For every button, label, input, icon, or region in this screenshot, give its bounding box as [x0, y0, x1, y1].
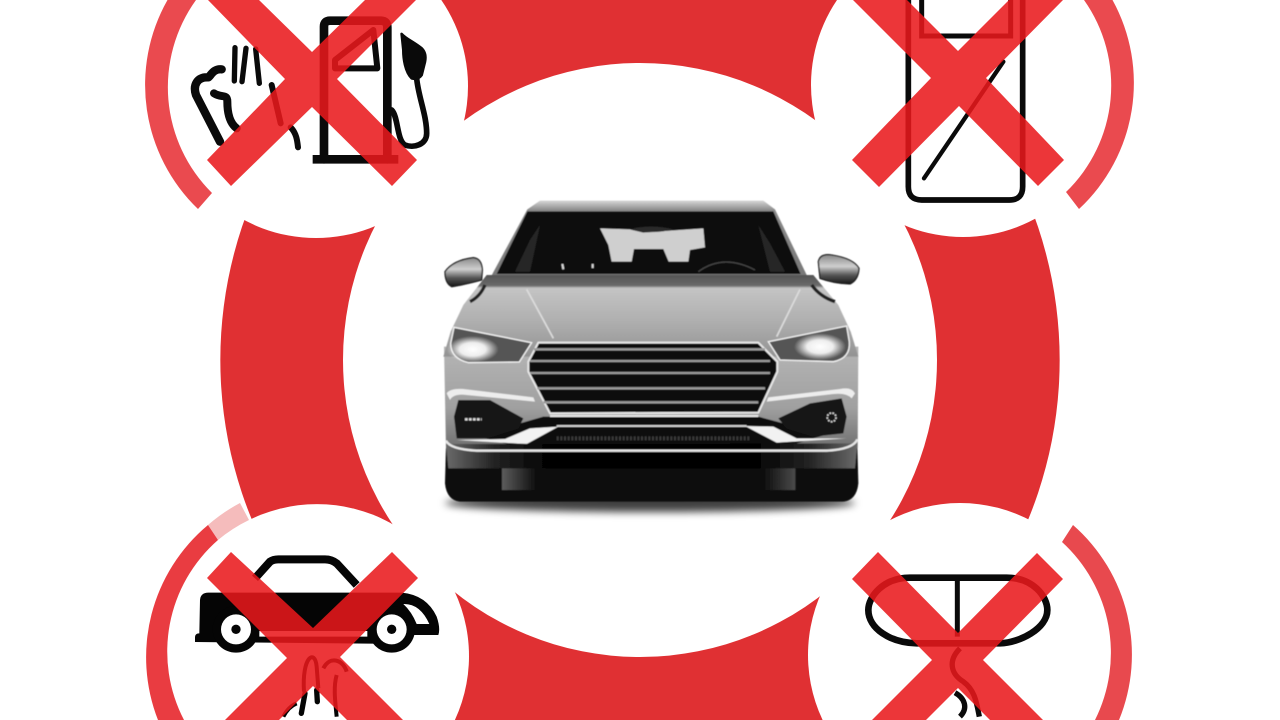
bumper line	[446, 439, 857, 451]
icon: phone	[908, 0, 1023, 200]
outer arc	[146, 525, 218, 720]
panel: top-right prohibition, no phone	[852, 0, 1134, 209]
red cross	[207, 552, 418, 720]
right headlight	[768, 326, 849, 362]
body lower	[444, 347, 858, 448]
windshield	[497, 211, 801, 274]
red ring	[220, 0, 1060, 720]
car photo, front view	[443, 201, 859, 512]
gray underbody patch	[502, 468, 795, 490]
panel: bottom-right prohibition, no steering wheel	[852, 525, 1132, 720]
red cross	[852, 552, 1063, 720]
right fog vent	[778, 398, 847, 437]
panel: bottom-left prohibition, no car touching	[146, 503, 439, 720]
left fog vent	[454, 400, 523, 438]
icon: hand and fuel pump	[195, 21, 427, 159]
panel: top-left prohibition, no fuel pump	[145, 0, 427, 209]
hood	[443, 275, 858, 357]
icon: steering wheel and seat	[868, 578, 1047, 717]
outer arc	[1066, 0, 1134, 209]
windshield sticker	[600, 228, 705, 262]
left headlight	[451, 327, 532, 363]
lower fascia band	[467, 417, 830, 448]
chrome accents	[447, 388, 855, 402]
roof and pillars	[490, 201, 808, 278]
pale arc segment	[208, 503, 249, 540]
grille	[528, 343, 777, 413]
icon: car with hand	[195, 559, 439, 717]
outer arc	[145, 0, 212, 209]
ground shadow	[445, 494, 855, 512]
red cross	[852, 0, 1064, 187]
bumper lower	[446, 443, 857, 468]
outer arc	[1062, 525, 1132, 720]
underbody and tyres	[445, 447, 858, 502]
red cross	[207, 0, 417, 186]
left mirror	[445, 258, 482, 287]
right mirror	[818, 255, 859, 284]
white corner discs	[164, 0, 1115, 720]
